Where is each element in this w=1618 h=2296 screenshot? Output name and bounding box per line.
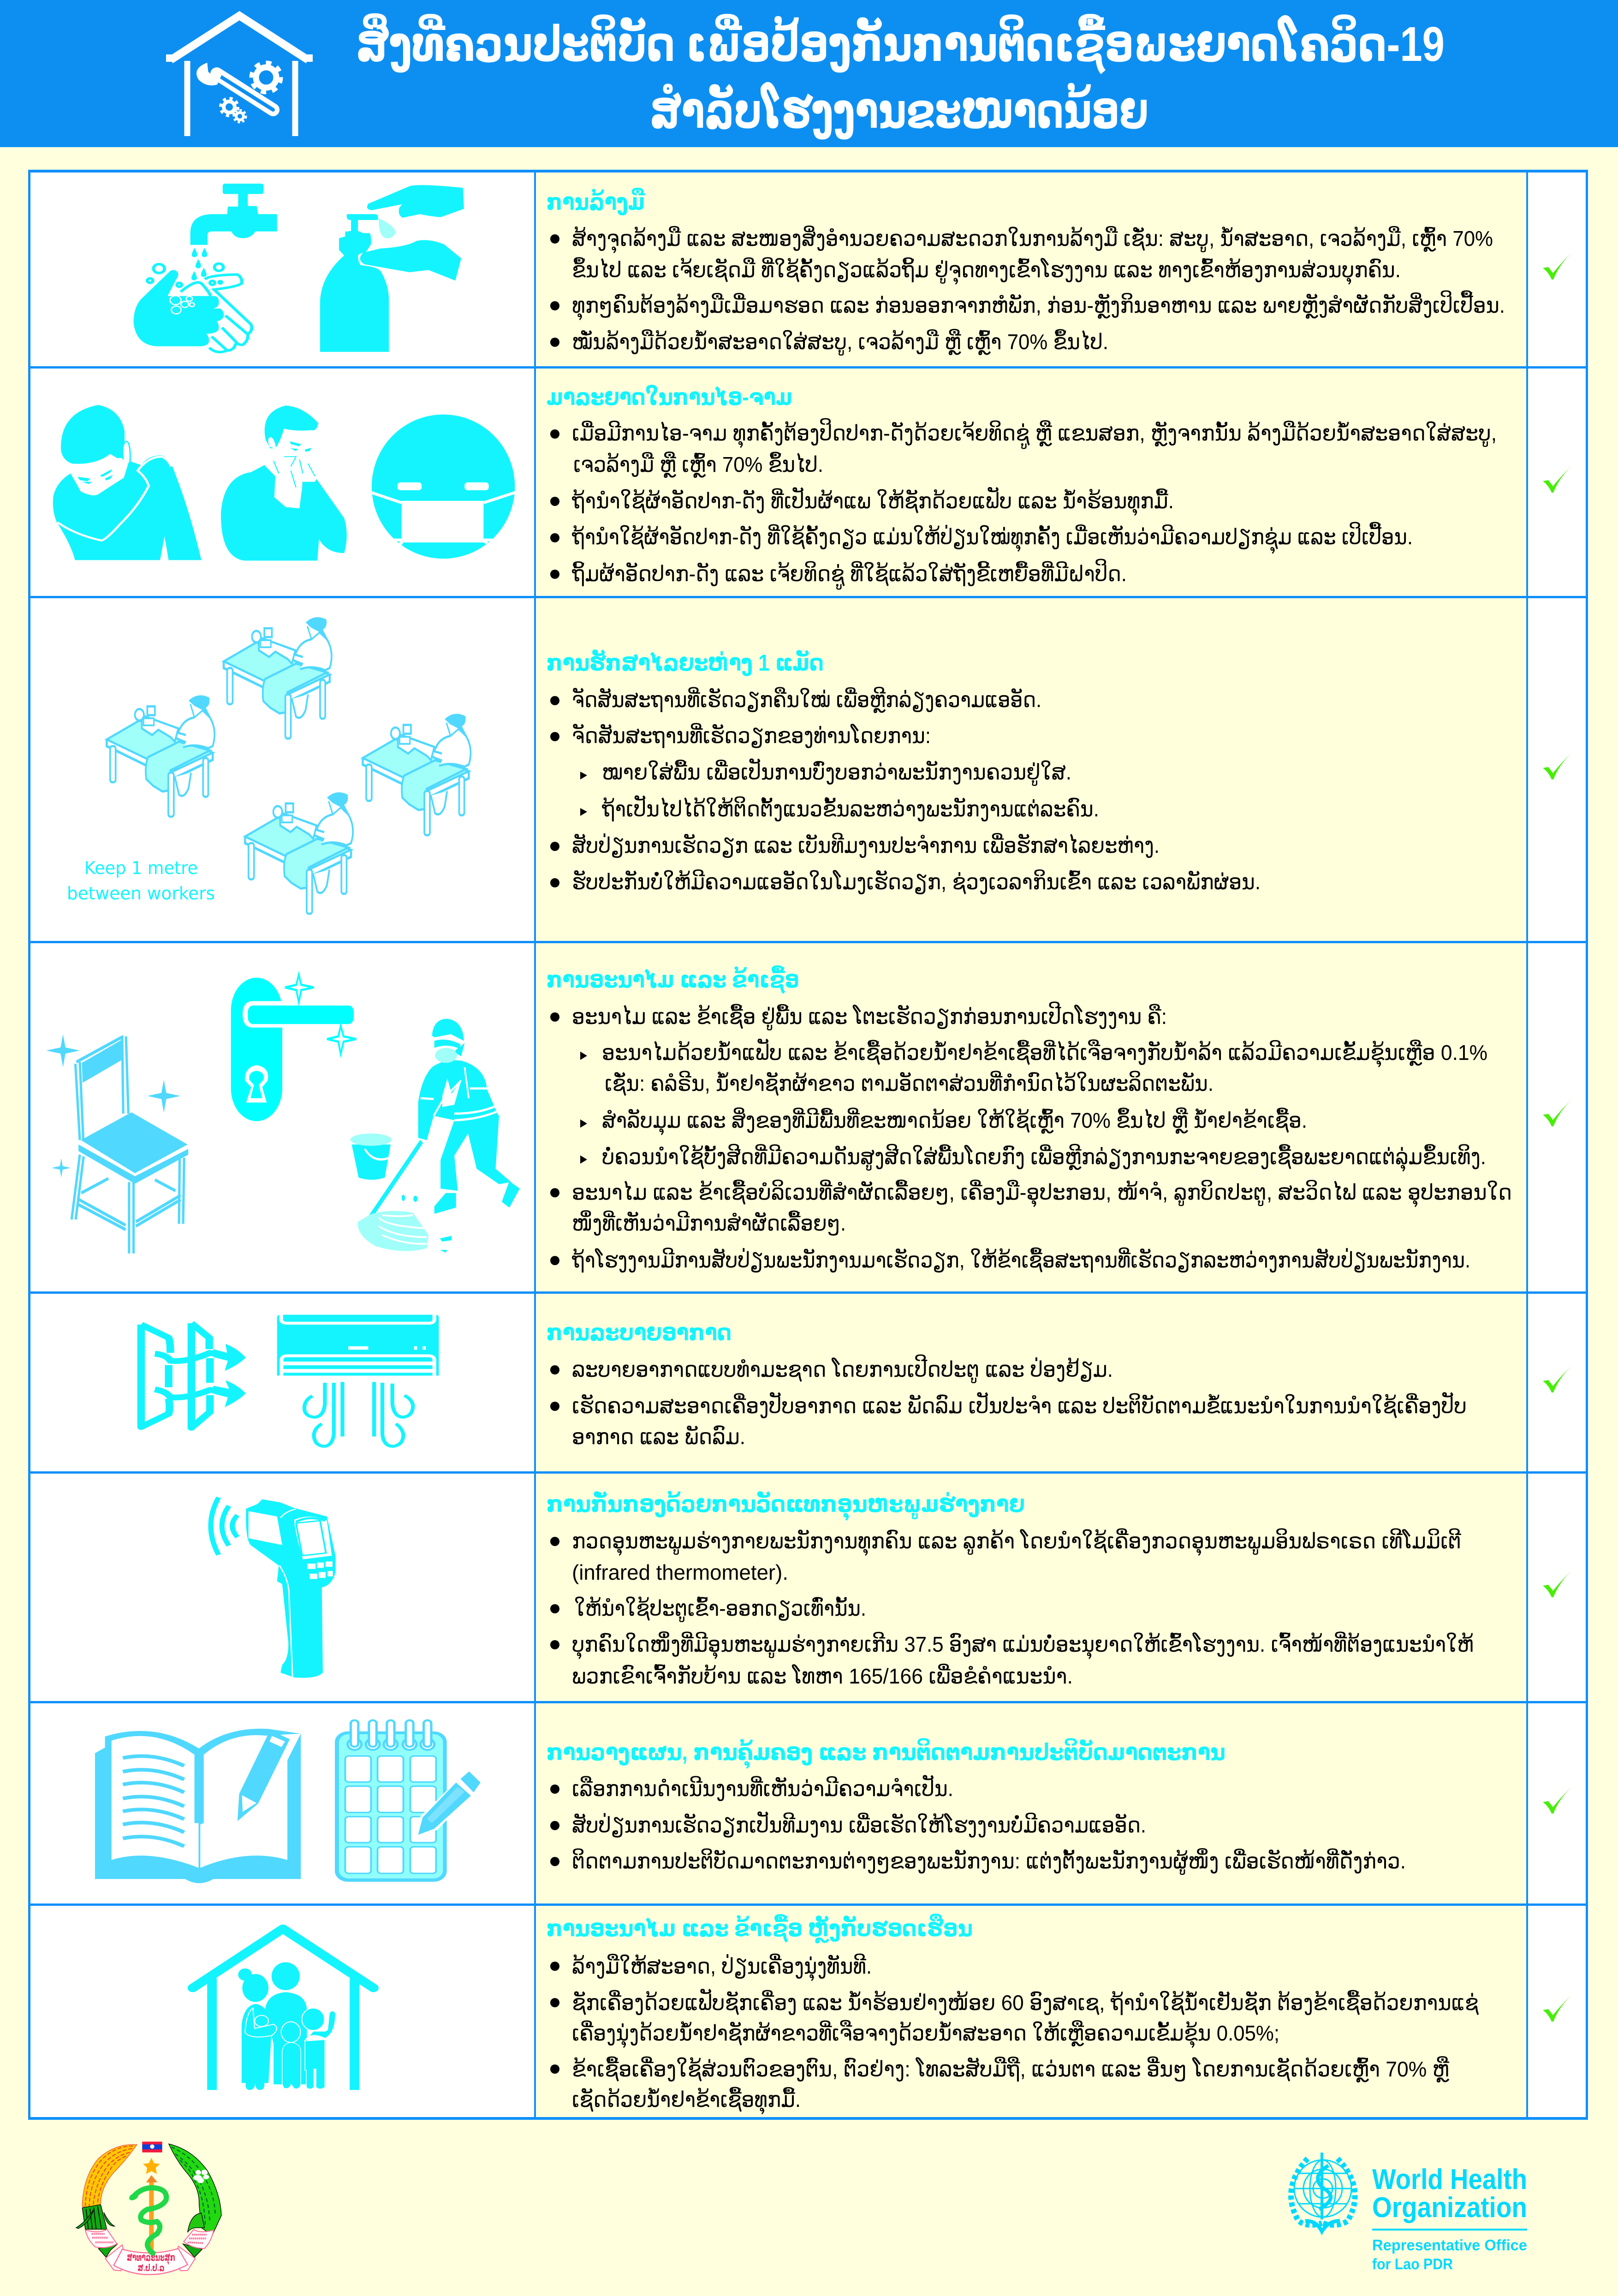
check mark bbox=[1543, 464, 1573, 493]
emblem text: ສາທາລະນະສຸກ bbox=[127, 2252, 175, 2265]
bullet list: ສຳລັບມຸມ ແລະ ສິ່ງຂອງທີ່ມີພື້ນທີ່ຂະໜາດນ້ອຍ ໃຫ້ໃຊ້ເຫຼົ້າ 70% ຂຶ້ນໄປ ຫຼື ນ້ຳຢາຂ້າເຊື້ອ. bbox=[602, 1107, 1307, 1136]
bullet list: ເຈວລ້າງມື ຫຼື ເຫຼົ້າ 70% ຂຶ້ນໄປ. bbox=[573, 452, 823, 478]
heading: ການວາງແຜນ, ການຄຸ້ມຄອງ ແລະ ການຕິດຕາມການປະຕິບັດມາດຕະການ bbox=[547, 1738, 1225, 1769]
who emblem bbox=[1291, 2153, 1355, 2231]
bullet list bbox=[550, 1774, 1406, 1875]
bullet list: ເຊັ່ນ: ຄລໍຣີນ, ນ້ຳຢາຊັກຜ້າຂາວ ຕາມອັດຕາສ່ວນທີ່ກຳນົດໄວ້ໃນຜະລິດຕະພັນ. bbox=[605, 1071, 1214, 1096]
bullet list: ກວດອຸນຫະພູມຮ່າງກາຍພະນັກງານທຸກຄົນ ແລະ ລູກຄ້າ ໂດຍນຳໃຊ້ເຄື່ອງກວດອຸນຫະພູມອິນຟຣາເຣດ ເທີໂມມິເຕີ bbox=[572, 1528, 1461, 1556]
bullet list bbox=[550, 687, 1261, 894]
emblem text bbox=[127, 2252, 175, 2273]
bullet list bbox=[550, 226, 1505, 356]
bullet list: ບໍ່ຄວນນຳໃຊ້ບັ້ງສີດທີ່ມີຄວາມດັນສູງສີດໃສ່ພື້ນໂດຍກົງ ເພື່ອຫຼີກລ່ຽງການກະຈາຍຂອງເຊື້ອພະຍາດແຕ່ລຸ່ມຂຶ້ນເທິງ. bbox=[602, 1144, 1486, 1172]
caption: keep 1 metre: Keep 1 metre bbox=[84, 858, 198, 878]
icon: chair, door handle and mopping worker bbox=[46, 975, 520, 1254]
panel: planning and monitoring bbox=[95, 1720, 1573, 1883]
bullet list: ຂ້າເຊື້ອເຄື່ອງໃຊ້ສ່ວນຕົວຂອງຕົນ, ຕົວຢ່າງ: ໂທລະສັບມືຖື, ແວ່ນຕາ ແລະ ອື່ນໆ ໂດຍການເຊັດດ້ວຍເຫຼົ້າ 70% ຫຼື bbox=[572, 2056, 1450, 2082]
header banner bbox=[0, 0, 1618, 147]
bullet list bbox=[550, 1528, 1474, 1688]
bullet list: ໃຫ້ນຳໃຊ້ປະຕູເຂົ້າ-ອອກດຽວເທົ່ານັ້ນ. bbox=[574, 1596, 866, 1622]
icon: tap, washing hands and sanitiser bottle bbox=[134, 184, 464, 352]
panel: ventilation bbox=[141, 1314, 1573, 1449]
emblem text: ສ.ປ.ປ.ລ bbox=[137, 2262, 165, 2273]
heading: ການຮັກສາໄລຍະຫ່າງ 1 ແມັດ bbox=[547, 649, 824, 676]
bullet list bbox=[550, 1002, 1512, 1273]
bullet list: ສັບປ່ຽນການເຮັດວຽກ ແລະ ເບັນທີມງານປະຈຳການ ເພື່ອຮັກສາໄລຍະຫ່າງ. bbox=[572, 833, 1160, 858]
who wordmark bbox=[1372, 2164, 1527, 2272]
icon: factory house with wrench and gears bbox=[169, 16, 309, 136]
bullet list: ໝາຍໃສ່ພື້ນ ເພື່ອເປັນການບົ່ງບອກວ່າພະນັກງານຄວນຢູ່ໃສ. bbox=[602, 758, 1071, 786]
heading: ການກັ່ນກອງດ້ວຍການວັດແທກອຸນຫະພູມຮ່າງກາຍ bbox=[547, 1491, 1025, 1521]
bullet list: ຈັດສັນສະຖານທີ່ເຮັດວຽກຂອງທ່ານໂດຍການ: bbox=[572, 723, 931, 748]
logo: Lao Ministry of Health emblem bbox=[76, 2141, 221, 2275]
who wordmark: Representative Office bbox=[1372, 2237, 1527, 2254]
bullet list: ຖ້າໂຮງງານມີການສັບປ່ຽນພະນັກງານມາເຮັດວຽກ, ໃຫ້ຂ້າເຊື້ອສະຖານທີ່ເຮັດວຽກລະຫວ່າງການສັບປ່ຽນພະນັກງານ. bbox=[571, 1247, 1470, 1273]
bullet list: ຮັບປະກັນບໍ່ໃຫ້ມີຄວາມແອອັດໃນໂມງເຮັດວຽກ, ຊ່ວງເວລາກິນເຂົ້າ ແລະ ເວລາພັກຜ່ອນ. bbox=[572, 869, 1261, 894]
bullet list: ອະນາໄມ ແລະ ຂ້າເຊື້ອ ຢູ່ພື້ນ ແລະ ໂຕະເຮັດວຽກກ່ອນການເປີດໂຮງງານ ຄື: bbox=[572, 1002, 1167, 1030]
rice wreath bbox=[82, 2145, 137, 2211]
bullet list: ລະບາຍອາກາດແບບທຳມະຊາດ ໂດຍການເປີດປະຕູ ແລະ ປ່ອງຢ້ຽມ. bbox=[572, 1355, 1113, 1383]
bullet list: ໜຶ່ງທີ່ເຫັນວ່າມີການສຳຜັດເລື້ອຍໆ. bbox=[572, 1210, 846, 1236]
bullet list: ບຸກຄົນໃດໜຶ່ງທີ່ມີອຸນຫະພູມຮ່າງກາຍເກີນ 37.5 ອົງສາ ແມ່ນບໍ່ອະນຸຍາດໃຫ້ເຂົ້າໂຮງງານ. ເຈົ້າໜ້າທີ່ຕ້ອງແນະນຳໃຫ້ bbox=[572, 1631, 1474, 1660]
caption: keep 1 metre bbox=[67, 858, 215, 904]
heading: ການອະນາໄມ ແລະ ຂ້າເຊື້ອ bbox=[547, 965, 799, 994]
check mark bbox=[1543, 1993, 1573, 2022]
title bbox=[356, 12, 1445, 140]
who wordmark: for Lao PDR bbox=[1372, 2255, 1453, 2272]
bullet list: ອະນາໄມດ້ວຍນ້ຳແຟັບ ແລະ ຂ້າເຊື້ອດ້ວຍນ້ຳຢາຂ້າເຊື້ອທີ່ໄດ້ເຈືອຈາງກັບນ້ຳລ້າ ແລ້ວມີຄວາມເຂັ້ມຂຸ້ນເຫຼືອ 0.1% bbox=[602, 1038, 1487, 1068]
logo: World Health Organization bbox=[1291, 2153, 1527, 2272]
bullet list bbox=[550, 1953, 1479, 2115]
who wordmark: Organization bbox=[1372, 2192, 1527, 2224]
bullet list: ຂຶ້ນໄປ ແລະ ເຈ້ຍເຊັດມື ທີ່ໃຊ້ຄັ້ງດຽວແລ້ວຖິ້ມ ຢູ່ຈຸດທາງເຂົ້າໂຮງງານ ແລະ ທາງເຂົ້າຫ້ອງການສ່ວນບຸກຄົນ. bbox=[572, 257, 1401, 285]
icon: people coughing and mask bbox=[53, 405, 515, 561]
bullet list: ຖ້ານຳໃຊ້ຜ້າອັດປາກ-ດັງ ທີ່ເປັນຜ້າແພ ໃຫ້ຊັກດ້ວຍແຟັບ ແລະ ນ້ຳຮ້ອນທຸກມື້. bbox=[571, 486, 1174, 516]
panel: after returning home bbox=[193, 1913, 1573, 2115]
bullet list: ໝັ່ນລ້າງມືດ້ວຍນ້ຳສະອາດໃສ່ສະບູ, ເຈວລ້າງມື ຫຼື ເຫຼົ້າ 70% ຂຶ້ນໄປ. bbox=[572, 329, 1108, 356]
panel: hand washing bbox=[134, 184, 1573, 356]
heading: ມາລະຍາດໃນການໄອ-ຈາມ bbox=[547, 384, 792, 410]
bullet list bbox=[550, 1355, 1467, 1449]
check mark bbox=[1543, 251, 1573, 280]
bullet list: ເຄື່ອງນຸ່ງດ້ວຍນ້ຳຢາຊັກຜ້າຂາວທີ່ເຈືອຈາງດ້ວຍນ້ຳສະອາດ ໃຫ້ເຫຼືອຄວາມເຂັ້ມຂຸ້ນ 0.05%; bbox=[572, 2020, 1279, 2048]
check mark bbox=[1543, 1364, 1573, 1392]
bullet list: ຕິດຕາມການປະຕິບັດມາດຕະການຕ່າງໆຂອງພະນັກງານ: ແຕ່ງຕັ້ງພະນັກງານຜູ້ໜຶ່ງ ເພື່ອເຮັດໜ້າທີ່ດັ່ງກ່າວ. bbox=[572, 1848, 1406, 1875]
flag bbox=[142, 2141, 162, 2153]
bullet list: ສ້າງຈຸດລ້າງມື ແລະ ສະໜອງສິ່ງອຳນວຍຄວາມສະດວກໃນການລ້າງມື ເຊັ່ນ: ສະບູ, ນ້ຳສະອາດ, ເຈວລ້າງມື, ເຫຼົ້າ 70% bbox=[572, 226, 1493, 254]
panel: cleaning and disinfecting bbox=[46, 965, 1573, 1273]
bullet list: ເຊັດດ້ວຍນ້ຳຢາຂ້າເຊື້ອທຸກມື້. bbox=[572, 2087, 801, 2115]
bullet list: ຖ້າເປັນໄປໄດ້ໃຫ້ຕິດຕັ້ງແນວຂັ້ນລະຫວ່າງພະນັກງານແຕ່ລະຄົນ. bbox=[601, 795, 1099, 821]
check mark bbox=[1543, 1785, 1573, 1814]
bullet list: ທຸກໆຄົນຕ້ອງລ້າງມືເມື່ອມາຮອດ ແລະ ກ່ອນອອກຈາກຫໍພັກ, ກ່ອນ-ຫຼັງກິນອາຫານ ແລະ ພາຍຫຼັງສຳຜັດກັບສິ່ງເປິເປື້ອນ. bbox=[572, 291, 1505, 321]
bullet list bbox=[550, 418, 1497, 589]
bullet list: ເຮັດຄວາມສະອາດເຄື່ອງປັບອາກາດ ແລະ ພັດລົມ ເປັນປະຈຳ ແລະ ປະຕິບັດຕາມຂໍ້ແນະນຳໃນການນຳໃຊ້ເຄື່ອງປັບ bbox=[572, 1392, 1467, 1418]
check mark bbox=[1543, 751, 1573, 779]
heading: ການລ້າງມື bbox=[547, 187, 645, 215]
icon: open window and air conditioner bbox=[141, 1314, 439, 1446]
ribbons bbox=[85, 2229, 214, 2275]
bullet list: ເລືອກການດຳເນີນງານທີ່ເຫັນວ່າມີຄວາມຈຳເປັນ. bbox=[572, 1774, 953, 1801]
bullet list: ຖິ້ມຜ້າອັດປາກ-ດັງ ແລະ ເຈ້ຍທິດຊູ່ ທີ່ໃຊ້ແລ້ວໃສ່ຖັງຂີ້ເຫຍື້ອທີ່ມີຝາປິດ. bbox=[571, 559, 1127, 589]
icon: four spaced sewing stations bbox=[107, 617, 470, 914]
bullet list: ສັບປ່ຽນການເຮັດວຽກເປັນທີມງານ ເພື່ອເຮັດໃຫ້ໂຮງງານບໍ່ມີຄວາມແອອັດ. bbox=[572, 1811, 1146, 1838]
icon: open book and calendar with pencils bbox=[95, 1720, 481, 1883]
panel: physical distancing bbox=[67, 617, 1573, 914]
bullet list: ອາກາດ ແລະ ພັດລົມ. bbox=[572, 1425, 745, 1449]
bullet list: ຊັກເຄື່ອງດ້ວຍແຟັບຊັກເຄື່ອງ ແລະ ນ້ຳຮ້ອນຢ່າງໜ້ອຍ 60 ອົງສາເຊ, ຖ້ານຳໃຊ້ນ້ຳເຢັນຊັກ ຕ້ອງຂ້າເຊື້ອດ້ວຍການແຊ່ bbox=[572, 1988, 1479, 2015]
bullet list: ອະນາໄມ ແລະ ຂ້າເຊື້ອບໍລິເວນທີ່ສຳຜັດເລື້ອຍໆ, ເຄື່ອງມື-ອຸປະກອນ, ໜ້າຈໍ, ລູກບິດປະຕູ, ສະວິດໄຟ ແລະ ອຸປະກອນໃດ bbox=[572, 1179, 1512, 1207]
bullet list: ຈັດສັນສະຖານທີ່ເຮັດວຽກຄືນໃໝ່ ເພື່ອຫຼີກລ່ຽງຄວາມແອອັດ. bbox=[572, 687, 1041, 713]
bullet list: (infrared thermometer). bbox=[572, 1560, 788, 1584]
staff and serpent bbox=[128, 2175, 167, 2254]
title: ສຳລັບໂຮງງານຂະໜາດນ້ອຍ bbox=[650, 82, 1148, 140]
check mark bbox=[1543, 1098, 1573, 1126]
star bbox=[143, 2158, 160, 2174]
heading: ການລະບາຍອາກາດ bbox=[547, 1320, 732, 1345]
bullet list: ພວກເຂົາເຈົ້າກັບບ້ານ ແລະ ໂທຫາ 165/166 ເພື່ອຂໍຄຳແນະນຳ. bbox=[572, 1664, 1073, 1688]
who wordmark: World Health bbox=[1372, 2164, 1527, 2195]
coffee wreath bbox=[169, 2144, 221, 2236]
bullet list: ຖ້ານຳໃຊ້ຜ້າອັດປາກ-ດັງ ທີ່ໃຊ້ຄັ້ງດຽວ ແມ່ນໃຫ້ປ່ຽນໃໝ່ທຸກຄັ້ງ ເມື່ອເຫັນວ່າມີຄວາມປຽກຊຸ່ມ ແລະ ເປິເປື້ອນ. bbox=[571, 522, 1413, 554]
panel: temperature screening bbox=[211, 1491, 1573, 1688]
bullet list: ລ້າງມືໃຫ້ສະອາດ, ປ່ຽນເຄື່ອງນຸ່ງທັນທີ. bbox=[572, 1953, 872, 1981]
check mark bbox=[1543, 1569, 1573, 1597]
icon: family in a house bbox=[193, 1929, 374, 2090]
heading: ການອະນາໄມ ແລະ ຂ້າເຊື້ອ ຫຼັງກັບຮອດເຮືອນ bbox=[547, 1913, 973, 1944]
caption: keep 1 metre: between workers bbox=[67, 883, 215, 904]
bullet list: ເມື່ອມີການໄອ-ຈາມ ທຸກຄັ້ງຕ້ອງປິດປາກ-ດັງດ້ວຍເຈ້ຍທິດຊູ່ ຫຼື ແຂນສອກ, ຫຼັງຈາກນັ້ນ ລ້າງມືດ້ວຍນ້ຳສະອາດໃສ່ສະບູ, bbox=[572, 418, 1497, 449]
left stalk bundle bbox=[76, 2205, 114, 2229]
icon: infrared thermometer bbox=[211, 1498, 336, 1678]
panel: cough and sneeze etiquette bbox=[53, 384, 1573, 589]
